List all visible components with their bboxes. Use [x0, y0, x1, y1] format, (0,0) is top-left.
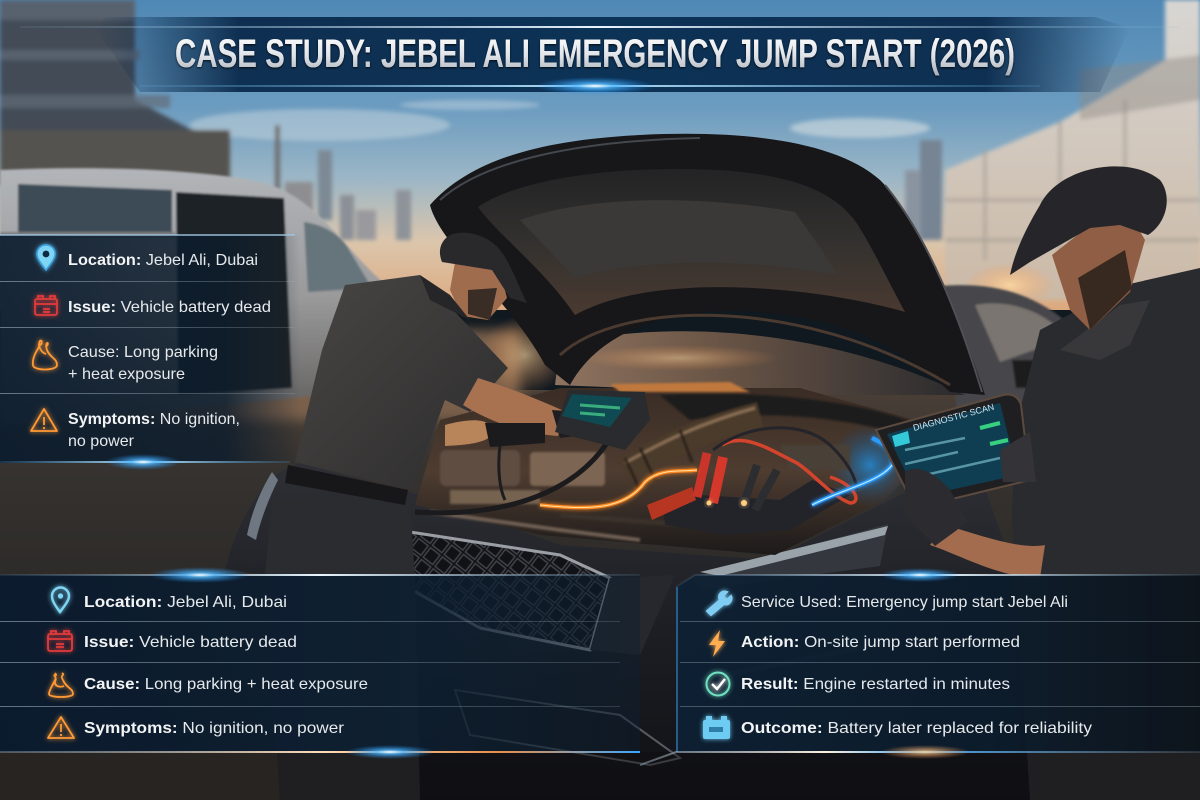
- icon: warning triangle: [31, 409, 57, 431]
- icon: location pin: [37, 245, 55, 270]
- handheld jump-start meter: [555, 390, 650, 450]
- battery: [663, 480, 850, 535]
- icon: warning triangle: [48, 717, 74, 738]
- icon: heat: [49, 673, 73, 697]
- result text: Result: Engine restarted in minutes: [741, 676, 1010, 693]
- open car hood: [430, 134, 985, 395]
- issue text: Issue: Vehicle battery dead: [68, 299, 271, 316]
- service van: [0, 168, 395, 425]
- title banner: [20, 17, 1180, 95]
- service text: Service Used: Emergency jump start Jebel Ali: [741, 594, 1068, 611]
- icon: lightning bolt: [709, 630, 725, 657]
- blue glowing current: [812, 438, 893, 505]
- tablet heading: DIAGNOSTIC SCAN: [912, 402, 995, 433]
- icon: location pin: [52, 588, 69, 612]
- icon: check circle: [706, 672, 730, 696]
- symptoms text: Symptoms: No ignition, no power: [84, 720, 345, 737]
- second car behind: [940, 285, 1085, 430]
- icon: wrench: [707, 592, 732, 615]
- cause text: Cause: Long parking: [68, 344, 218, 361]
- outcome text: Outcome: Battery later replaced for reliability: [741, 720, 1092, 737]
- engine bay: [415, 382, 950, 555]
- symptoms text second line: no power: [68, 433, 135, 450]
- icon: dead battery: [48, 631, 72, 651]
- icon: new battery: [703, 716, 730, 739]
- icon: dead battery: [35, 296, 57, 315]
- diagnostic tablet: [876, 394, 1030, 508]
- icon: heat: [33, 341, 57, 370]
- right mechanic: [930, 166, 1200, 800]
- panel: bottom left case facts: [0, 567, 640, 759]
- panel: top left case facts: [0, 234, 300, 470]
- symptoms text: Symptoms: No ignition,: [68, 411, 240, 428]
- location text: Location: Jebel Ali, Dubai: [68, 252, 258, 269]
- action text: Action: On-site jump start performed: [741, 634, 1020, 651]
- panel: bottom right service outcome: [640, 568, 1200, 765]
- orange glowing current: [540, 470, 697, 508]
- windshield reflection: [555, 331, 965, 395]
- cause text second line: + heat exposure: [68, 366, 185, 383]
- bottom ground shade: [0, 752, 1200, 800]
- location text: Location: Jebel Ali, Dubai: [84, 594, 287, 611]
- gloved hands on tablet: [905, 432, 1036, 546]
- cause text: Cause: Long parking + heat exposure: [84, 676, 368, 693]
- issue text: Issue: Vehicle battery dead: [84, 634, 297, 651]
- car body and front: [225, 460, 1040, 800]
- left mechanic: [265, 233, 592, 800]
